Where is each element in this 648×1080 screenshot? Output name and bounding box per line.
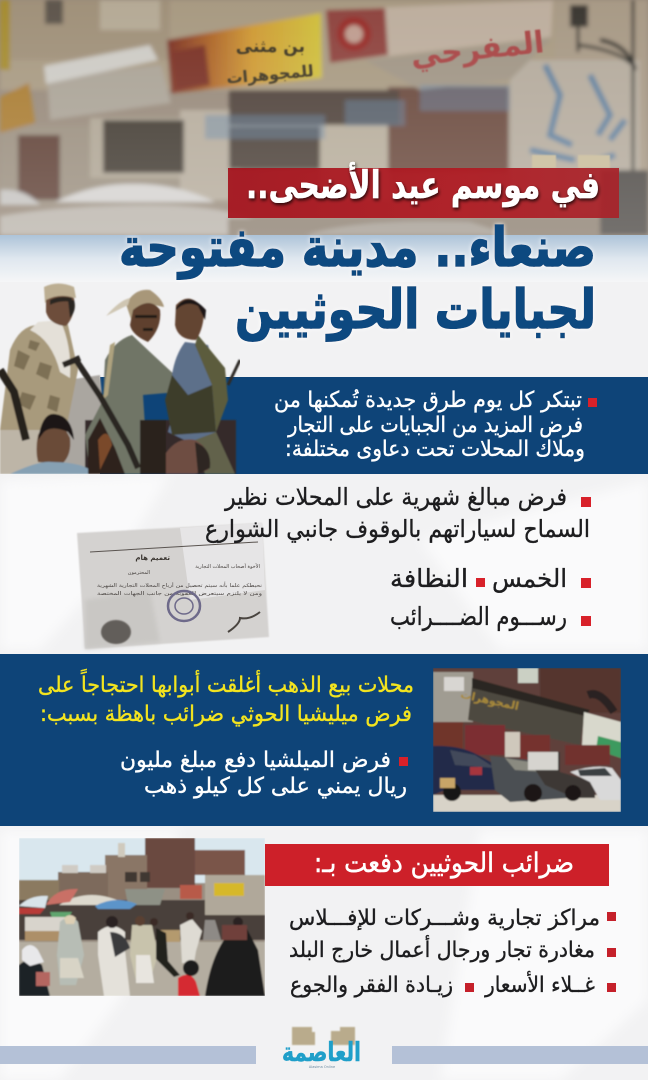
panel: gold shops blue band: فرض ميليشيا الحوثي ضرائب باهظة بسبب: [40, 702, 412, 727]
list: consequences of the taxes: مراكز تجارية وشـــركات للإفـــلاس [289, 906, 600, 931]
photo: closed gold shops with parked cars: المجوهرات [459, 688, 520, 713]
photo: Sanaa street market [19, 838, 265, 996]
footer bars [0, 1046, 648, 1064]
logo: Al-Asima Online [282, 1027, 361, 1069]
panel: consequences heading: ضرائب الحوثيين دفعت بـ: [314, 848, 574, 879]
panel: intro blue band: تبتكر كل يوم طرق جديدة تُمكنها من [274, 388, 582, 413]
umbrellas [59, 895, 128, 905]
dark blue sedan [433, 745, 496, 795]
watermark [205, 85, 510, 139]
list: consequences of the taxes: مغادرة تجار ورجال أعمال خارج البلد [289, 935, 595, 963]
dark shutters [103, 120, 184, 173]
blue graffiti [530, 65, 625, 165]
list: consequences of the taxes [289, 906, 616, 998]
left man [0, 324, 79, 431]
photo: tax notice document: المحترمون [128, 570, 150, 576]
second man [85, 335, 178, 474]
dark vehicle backdrop [63, 374, 103, 468]
photo: armed Houthi men [0, 284, 240, 474]
background photo: closed shops in Sanaa: للمجوهرات [226, 61, 314, 88]
panel: intro blue band [100, 377, 648, 474]
background photo: closed shops in Sanaa: المفرحي [409, 25, 546, 74]
list: street-parking fee and other levies: النظافة [390, 564, 468, 593]
grey Mercedes [490, 756, 568, 802]
sign texts in the photo: بن مثنى [236, 37, 305, 57]
background photo: closed shops in Sanaa [0, 0, 648, 238]
logo: Al-Asima Online: Alasima Online [309, 1065, 335, 1069]
photo: tax notice document: نحيطكم علما بأنه سيتم تحصيل من أرباح المحلات التجارية الشهرية [97, 581, 262, 589]
list: consequences of the taxes: زيـادة الفقر والجوع [290, 973, 453, 998]
right man [167, 341, 216, 441]
lower head and man [36, 427, 71, 464]
photo: tax notice document [77, 523, 269, 649]
photo: tax notice document: الأخوة أصحاب المحلات التجارية [195, 563, 260, 570]
list: street-parking fee and other levies [205, 483, 591, 631]
panel: gold shops blue band: محلات بيع الذهب أغلقت أبوابها احتجاجاً على [38, 668, 414, 698]
panel: gold shops blue band [0, 654, 648, 826]
stalls [25, 917, 65, 931]
pickup [526, 752, 595, 798]
keffiyeh head [165, 438, 202, 474]
child [178, 975, 200, 996]
white car [570, 767, 621, 800]
list: consequences of the taxes: غــلاء الأسعار [484, 971, 595, 998]
logo: Al-Asima Online: العاصمة [282, 1038, 361, 1068]
lamp [570, 5, 588, 27]
red kicker banner [228, 161, 619, 218]
list: street-parking fee and other levies: رســـوم الضــــرائب [390, 602, 567, 631]
list: street-parking fee and other levies: السماح لسياراتهم بالوقوف جانبي الشوارع [205, 515, 590, 543]
headline background band [0, 235, 648, 282]
panel: intro blue band: وملاك المحلات تحت دعاوى مختلفة: [285, 437, 585, 462]
list: street-parking fee and other levies: فرض مبالغ شهرية على المحلات نظير [224, 483, 567, 511]
photo: closed gold shops with parked cars [433, 668, 621, 812]
photo: tax notice document: تعميم هام [135, 554, 170, 562]
black abaya [205, 925, 265, 996]
list: street-parking fee and other levies: الخمس [492, 564, 567, 593]
tilted panels [47, 65, 171, 120]
ground [19, 942, 265, 996]
rifle [63, 358, 138, 468]
photo: tax notice document: ومن لا يلتزم سيتعرض للعقوبة من جانب الجهات المختصة [97, 591, 263, 597]
panel: consequences heading [265, 844, 609, 886]
cars [55, 184, 215, 202]
panel: intro blue band: فرض المزيد من الجبايات على التجار [287, 413, 583, 438]
panel: gold shops blue band: فرض الميلشيا دفع مبلغ مليون [120, 748, 391, 773]
woman and child at left [19, 960, 50, 996]
main title [119, 216, 596, 341]
panel: gold shops blue band: ريال يمني على كل كيلو ذهب [144, 774, 407, 799]
people [57, 917, 84, 985]
